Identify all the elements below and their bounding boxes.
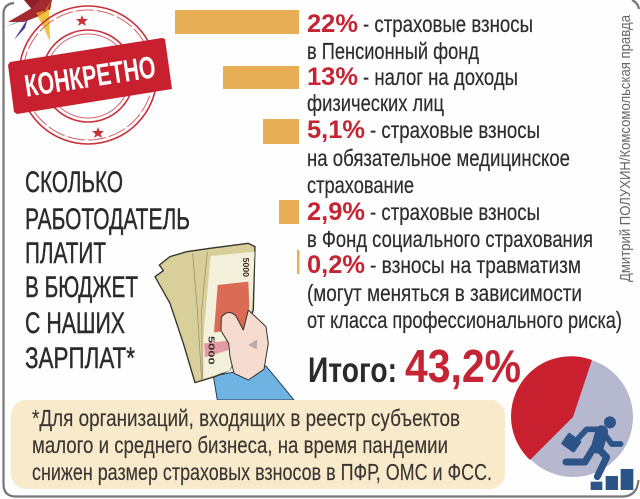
footnote box: малого и среднего бизнеса, на время пандемии [32, 432, 448, 458]
icon: star burst [4, 0, 52, 42]
footnote box: снижен размер страховых взносов в ПФР, ОМС и ФСС. [32, 459, 492, 485]
text: 22%: - страховые взносы [363, 11, 533, 37]
icon: runner on steps [561, 416, 633, 490]
text: 2,9% [307, 198, 593, 252]
total [308, 340, 521, 392]
illustration: hand with money: 5000 [206, 336, 216, 365]
text: 5,1% [307, 116, 570, 198]
text: 22%: 22% [307, 10, 358, 38]
total: 43,2% [405, 340, 521, 392]
text: 5,1%: 5,1% [307, 116, 365, 144]
illustration: hand with money: 5000 [241, 258, 250, 278]
text: 5,1%: на обязательное медицинское [307, 145, 570, 171]
title: РАБОТОДАТЕЛЬ [25, 203, 190, 236]
text: 0,2% [307, 251, 622, 333]
bar chart: shares [175, 10, 300, 274]
text: 13%: - налог на доходы [363, 64, 518, 90]
total: Итого: [308, 351, 397, 390]
footnote box: *Для организаций, входящих в реестр субъектов [32, 405, 460, 431]
stamp: КОНКРЕТНО: КОНКРЕТНО [22, 49, 158, 104]
title [25, 166, 190, 375]
text: 0,2%: 0,2% [307, 251, 365, 279]
title: СКОЛЬКО [25, 166, 123, 199]
text: 22%: в Пенсионный фонд [307, 38, 479, 64]
text: 5,1%: страхование [307, 172, 414, 198]
text: 13%: 13% [307, 63, 358, 91]
text: 5,1%: - страховые взносы [370, 117, 540, 143]
footnote box [11, 400, 505, 489]
text: 13%: физических лиц [307, 90, 444, 116]
text: 2,9%: - страховые взносы [370, 199, 540, 225]
text: 0,2%: (могут меняться в зависимости [307, 280, 582, 306]
illustration: hand with money [155, 243, 294, 400]
title: ПЛАТИТ [25, 237, 106, 270]
title: ЗАРПЛАТ* [25, 342, 135, 375]
text: 2,9%: 2,9% [307, 198, 365, 226]
pie chart [511, 356, 633, 477]
title: В БЮДЖЕТ [25, 271, 138, 304]
text: 0,2%: - взносы на травматизм [370, 252, 581, 278]
text: 13% [307, 63, 518, 116]
text: 22% [307, 10, 533, 64]
title: С НАШИХ [25, 307, 125, 340]
stamp: КОНКРЕТНО [8, 6, 172, 144]
